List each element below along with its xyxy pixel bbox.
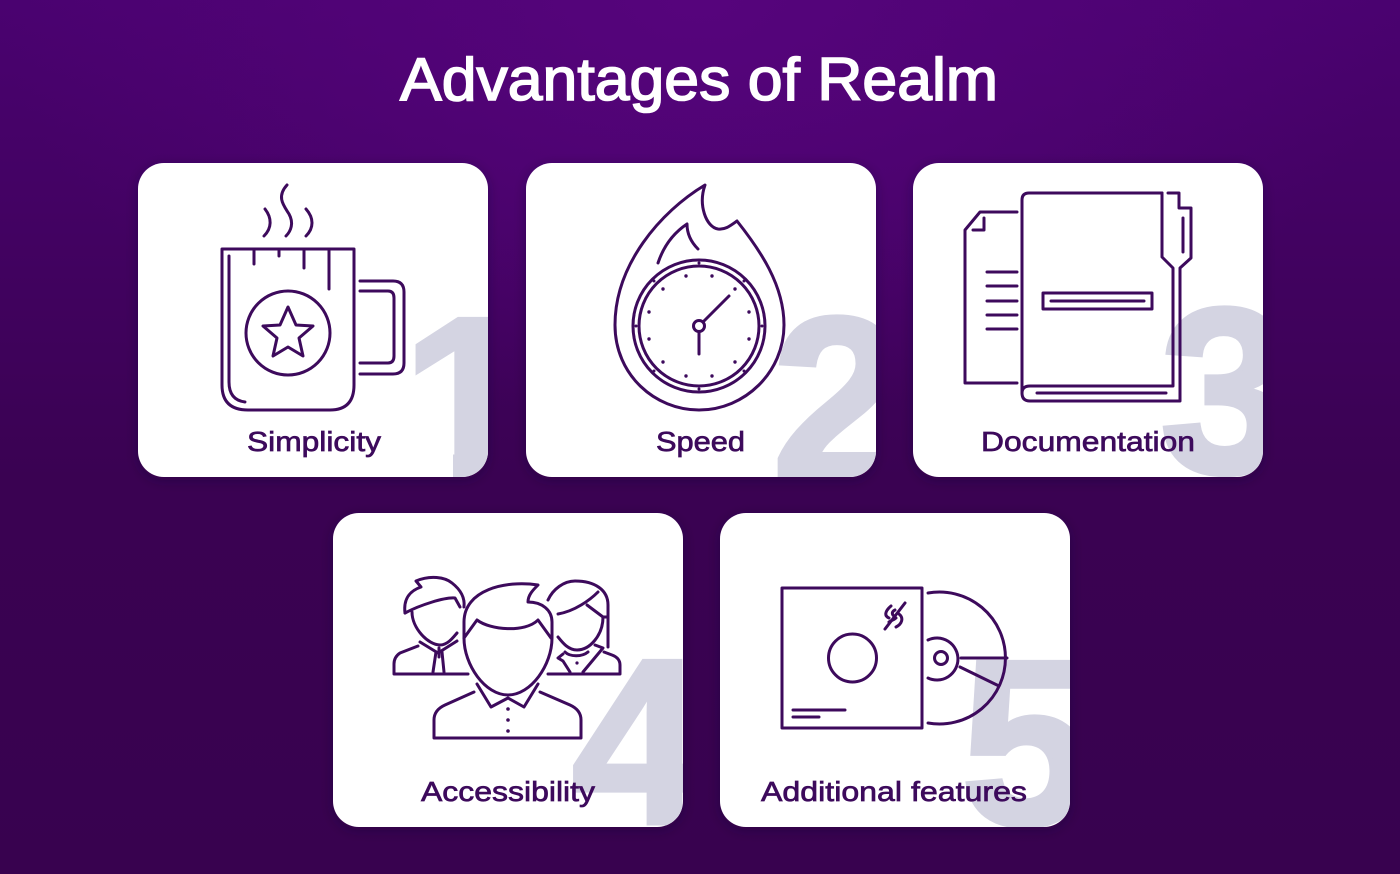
label: Documentation: [981, 426, 1195, 457]
panel: Speed: [523, 163, 879, 481]
icon: book and document: [965, 193, 1191, 401]
icon: disc and sleeve: [782, 588, 1007, 728]
label: Accessibility: [421, 776, 595, 807]
panel: Documentation: [910, 163, 1266, 481]
panel: Accessibility: [332, 513, 684, 831]
number 4: 4: [572, 610, 703, 873]
title: Advantages of Realm: [400, 46, 998, 113]
number 3: 3: [1160, 259, 1291, 522]
panel: Simplicity: [136, 163, 491, 481]
icon: flaming stopwatch: [615, 185, 784, 410]
panel: Additional features: [719, 513, 1071, 831]
number 1: 1: [402, 268, 533, 531]
number 2: 2: [772, 268, 903, 531]
number 5: 5: [961, 611, 1092, 874]
label: Additional features: [761, 776, 1027, 807]
label: Speed: [656, 426, 745, 457]
label: Simplicity: [247, 426, 381, 457]
icon: coffee mug: [222, 185, 404, 410]
icon: group of people: [394, 577, 620, 738]
